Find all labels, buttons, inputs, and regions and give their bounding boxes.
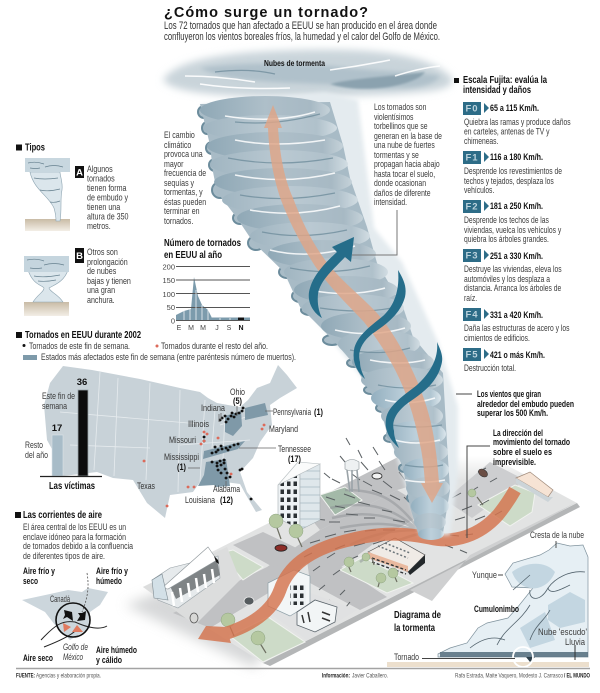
map labels: (12)	[220, 495, 233, 506]
body text: El área central de los EEUU es un	[23, 522, 126, 533]
F2: viviendas, vuelca los vehículos y	[464, 225, 562, 235]
F0: chimeneas.	[464, 136, 498, 146]
bar chart: victims	[25, 377, 102, 492]
map labels: Pennsylvania	[273, 407, 311, 418]
area chart: 100	[162, 290, 175, 299]
heading: Tipos	[16, 142, 45, 154]
text: climate change: sequías y	[164, 177, 195, 188]
text: climate change: tornados.	[164, 215, 193, 226]
text A: metros.	[87, 220, 111, 231]
F1	[463, 151, 562, 195]
callout: direction: La dirección del	[493, 428, 543, 439]
heading: intensidad y daños	[463, 84, 531, 96]
map labels: Maryland	[269, 424, 298, 435]
air map labels	[23, 566, 137, 666]
text: climate change: climático	[164, 139, 192, 150]
chart title: Número de tornados	[164, 237, 241, 249]
text: what tornadoes are: tormentas y se	[374, 150, 419, 160]
arrow: rising inner spiral	[264, 105, 443, 503]
mid buildings	[268, 570, 357, 640]
tall building	[278, 462, 320, 530]
text A: tornados	[87, 172, 115, 184]
badge B	[75, 248, 84, 263]
map labels: (1)	[177, 462, 186, 473]
area chart: N	[238, 325, 244, 332]
air map labels: Canadá	[50, 594, 70, 605]
area chart: 0	[171, 316, 175, 326]
storm cloud	[387, 543, 589, 667]
F1: techos y tejados, desplaza los	[464, 176, 554, 186]
map labels: Ohio	[230, 387, 245, 398]
area chart: M	[200, 325, 206, 332]
panel: Fujita scale	[454, 74, 571, 373]
callout: wind speed: Los vientos que giran	[477, 389, 541, 400]
cars	[190, 467, 489, 623]
F1: vehículos.	[464, 185, 494, 195]
text: what tornadoes are	[352, 102, 442, 255]
map labels: Mississippi	[164, 452, 199, 463]
area chart: 50	[167, 303, 175, 312]
F2	[463, 200, 562, 244]
F0: Quiebra las ramas y produce daños	[464, 117, 571, 127]
map labels: Missouri	[169, 435, 196, 446]
intro text	[164, 20, 440, 43]
panel: yearly chart	[162, 237, 250, 332]
storm diagram labels	[394, 530, 587, 663]
text: climate change: frecuencia de	[164, 167, 206, 178]
body text	[23, 522, 134, 562]
F5: Destrucción total.	[464, 363, 516, 373]
area chart: S	[227, 325, 232, 332]
F0: 65 a 115 Km/h.	[490, 103, 539, 114]
text: what tornadoes are: daños de diferente	[374, 188, 431, 198]
text B: una gran	[87, 284, 115, 295]
map labels: Indiana	[201, 403, 226, 414]
area chart: J	[215, 325, 219, 332]
heading: Tipos: Tipos	[25, 142, 45, 154]
F2: quiebra los árboles grandes.	[464, 234, 549, 244]
label: Nubes de tormenta: Nubes de tormenta	[264, 58, 325, 68]
map labels: Texas	[137, 481, 155, 492]
illustration: tornado funnel	[198, 92, 458, 540]
F5	[463, 348, 545, 373]
text: climate change: terminar en	[164, 205, 200, 216]
map labels: Illinois	[188, 419, 209, 430]
callout: direction: sobre el suelo es	[493, 447, 552, 458]
other tornado dots	[144, 425, 264, 506]
roads	[173, 456, 575, 628]
F0	[463, 102, 571, 146]
bar chart: victims: 36	[77, 377, 87, 388]
badge B: B	[76, 251, 83, 262]
footer: FUENTE:	[16, 672, 35, 680]
affected states	[198, 403, 268, 487]
diagram heading: la tormenta	[394, 622, 435, 634]
text: what tornadoes are: torbellinos que se	[374, 121, 428, 131]
F3: distancia. Arranca los árboles de	[464, 283, 562, 293]
text: what tornadoes are: generan en la base de	[374, 131, 442, 141]
area chart: M	[188, 325, 194, 332]
callout: wind speed	[456, 389, 574, 419]
air map labels: húmedo	[96, 576, 122, 587]
F4: cimientos de edificios.	[464, 333, 530, 343]
footer: Información:	[322, 672, 350, 680]
badge A	[75, 166, 84, 178]
text A: Algunos	[87, 163, 113, 174]
callout: wind speed: superar los 500 Km/h.	[477, 408, 548, 419]
F3: 251 a 330 Km/h.	[490, 251, 543, 262]
F3: automóviles y los desplaza a	[464, 274, 550, 284]
arrow: ground path of tornado	[198, 490, 515, 643]
bar chart: victims: del año	[25, 450, 48, 461]
text B: bajas y tienen	[87, 275, 131, 286]
body text: de diferentes tipos de aire.	[23, 551, 105, 562]
text: what tornadoes are: donde ocasionan	[374, 178, 426, 188]
body text: enclave idóneo para la formación	[23, 532, 126, 543]
air map labels: Aire húmedo	[96, 645, 137, 656]
heading	[454, 74, 547, 96]
bar chart: victims: semana	[42, 401, 68, 412]
map labels: (1)	[314, 407, 323, 418]
heading	[16, 329, 141, 341]
intro text: confluyeron los vientos boreales fríos, la humedad y el calor del Golfo de México.	[164, 31, 440, 43]
area chart: 150	[162, 276, 175, 285]
F3: F3	[465, 250, 479, 262]
map legend	[22, 341, 296, 363]
weekend tornado dots	[204, 408, 251, 499]
badge A: A	[76, 168, 83, 178]
panel: storm diagram	[387, 530, 589, 667]
map labels: Louisiana	[185, 495, 216, 506]
air map labels: y cálido	[96, 655, 122, 666]
text: what tornadoes are: violentísimos	[374, 112, 413, 122]
panel: tornado types	[16, 142, 131, 316]
bar chart: victims: Las víctimas	[49, 480, 95, 492]
F4: Daña las estructuras de acero y los	[464, 323, 569, 333]
footer: Javier Caballero.	[352, 672, 388, 680]
text: climate change: provoca una	[164, 148, 203, 159]
intro text: Los 72 tornados que han afectado a EEUU se han producido en el área donde	[164, 20, 437, 32]
F1: Desprende los revestimientos de	[464, 166, 562, 176]
text A: de embudo y	[87, 191, 129, 203]
text: climate change: El cambio	[164, 129, 195, 140]
lawns	[220, 485, 535, 662]
panel: air currents	[15, 509, 137, 666]
text: what tornadoes are: una nube de fuertes	[374, 140, 435, 150]
storm diagram labels: Nube 'escudo'	[538, 627, 587, 638]
callout: direction: imprevisible.	[493, 457, 536, 468]
diagram heading	[394, 609, 441, 634]
debris swirl	[278, 438, 502, 607]
illustration: storm clouds	[163, 50, 452, 97]
map labels: Tennessee	[278, 444, 311, 455]
bar chart: victims: 17	[52, 423, 62, 434]
destroyed building	[368, 538, 425, 575]
illustration: city ground	[125, 438, 580, 668]
map legend: Tornados durante el resto del año.	[161, 341, 268, 352]
F4: 331 a 420 Km/h.	[490, 310, 543, 321]
air map labels: Golfo de	[63, 642, 88, 653]
air map labels: Aire frío y	[23, 566, 56, 577]
heading	[15, 509, 102, 521]
right row of buildings	[516, 472, 553, 502]
bar chart: victims: Resto	[25, 440, 43, 451]
map labels	[137, 387, 323, 506]
text: climate change: mayor	[164, 158, 184, 169]
text: climate change: tormentas, y	[164, 186, 203, 197]
storm diagram labels: Cumulonimbo	[474, 604, 519, 615]
air map labels: México	[63, 652, 83, 663]
F2: Desprende los techos de las	[464, 215, 549, 225]
text: what tornadoes are: hasta tocar el suelo,	[374, 169, 435, 179]
chart title: en EEUU al año	[164, 249, 222, 261]
heading: Escala Fujita: evalúa la	[463, 74, 547, 86]
callout: direction: movimiento del tornado	[493, 437, 570, 448]
text: what tornadoes are: propagan hacia abajo	[374, 159, 440, 169]
text A: tienen forma	[87, 182, 127, 193]
storm diagram labels: Lluvia	[565, 637, 586, 648]
air map labels: Aire seco	[23, 653, 53, 664]
warehouse	[143, 547, 240, 625]
F0: F0	[465, 104, 479, 114]
trees	[221, 489, 483, 653]
text B: anchura.	[87, 294, 115, 305]
area chart	[162, 262, 250, 332]
footer: Agencias y elaboración propia.	[36, 672, 101, 680]
heading: Tornados en EEUU durante 2002	[25, 329, 141, 341]
text A: altura de 350	[87, 210, 129, 222]
footer	[16, 668, 590, 680]
F3: Destruye las viviendas, eleva los	[464, 264, 562, 274]
map legend: Tornados de este fin de semana.	[29, 341, 130, 352]
heading: Las corrientes de aire	[23, 509, 102, 521]
funnel streaks	[225, 112, 445, 482]
text: climate change: éstas pueden	[164, 196, 206, 207]
diagram heading: Diagrama de	[394, 609, 441, 621]
text: what tornadoes are: intensidad.	[374, 197, 407, 207]
air map labels: Aire frío y	[96, 566, 129, 577]
F1: F1	[465, 152, 479, 164]
F5: 421 o más Km/h.	[490, 350, 545, 361]
storm diagram labels: Tornado	[394, 652, 419, 663]
callout: direction	[467, 428, 570, 538]
F1: 116 a 180 Km/h.	[490, 152, 543, 163]
storm diagram labels: Yunque	[472, 570, 497, 581]
water tower	[345, 460, 359, 492]
F2: F2	[465, 202, 479, 212]
chart title	[164, 237, 241, 261]
body text: de tornados debido a la confluencia	[23, 541, 134, 552]
map labels: (17)	[288, 454, 301, 465]
area chart: E	[177, 325, 182, 332]
text B: de nubes	[87, 265, 116, 276]
panel: tornadoes in USA 2002	[16, 329, 323, 518]
area chart: 200	[162, 262, 175, 272]
F5: F5	[465, 350, 479, 360]
F4	[463, 308, 569, 343]
map labels: (5)	[233, 396, 242, 407]
icon: tornado type B	[24, 256, 69, 316]
funnel edge rings	[198, 106, 415, 502]
F0: en carteles, antenas de TV y	[464, 126, 550, 137]
F2: 181 a 250 Km/h.	[490, 201, 543, 212]
text B: Otros son	[87, 246, 118, 257]
air map	[22, 573, 108, 647]
F3	[463, 249, 562, 303]
arrow: teal spiral ribbon	[309, 237, 442, 448]
ground soft shadow	[125, 560, 270, 668]
title: ¿Cómo surge un tornado?	[164, 5, 368, 21]
footer: Rafa Estrada, Maite Vaquero, Modesto J. Carrasco	[455, 672, 563, 680]
text: what tornadoes are: Los tornados son	[374, 102, 427, 112]
bar chart: victims: Este fin de	[42, 391, 75, 402]
text A: tienen una	[87, 201, 120, 212]
F3: raíz.	[464, 293, 477, 303]
map labels: Alabama	[213, 484, 241, 495]
text B: prolongación	[87, 256, 128, 267]
map legend: Estados más afectados este fin de semana (entre paréntesis número de muertos).	[41, 352, 296, 363]
map of USA	[44, 365, 297, 518]
F4: F4	[465, 310, 479, 320]
air map labels: seco	[23, 576, 38, 587]
icon: tornado type A	[25, 158, 70, 231]
